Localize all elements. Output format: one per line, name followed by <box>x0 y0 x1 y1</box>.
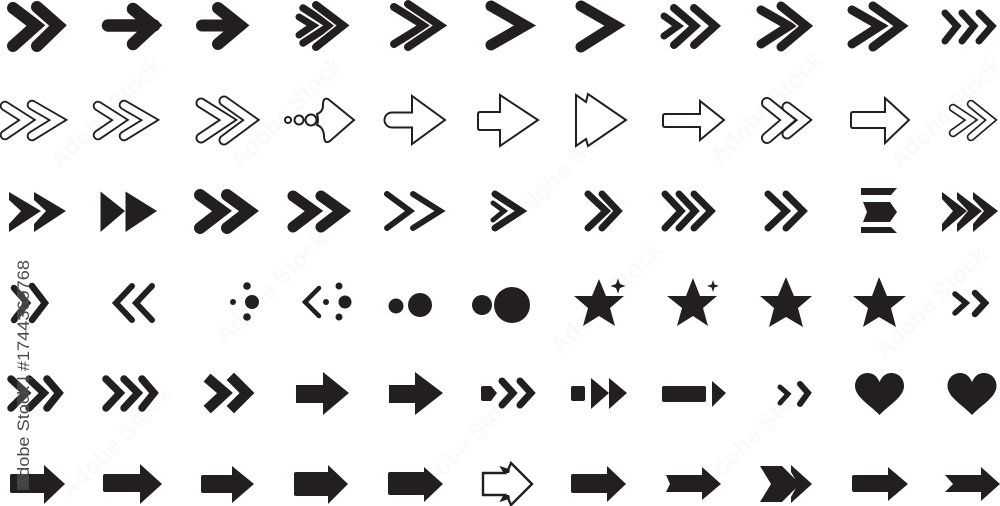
icon: outline double chevron <box>5 105 58 136</box>
icon: large chevron <box>491 6 525 45</box>
row 4 icons <box>14 277 985 327</box>
icon: heart <box>855 373 904 415</box>
row 1 icons <box>0 0 992 47</box>
icon: small double chevron <box>955 293 985 314</box>
background watermarks: Adobe Stock <box>210 226 333 349</box>
icon: triple chevron <box>665 194 711 228</box>
background watermarks: Adobe Stock <box>405 381 528 504</box>
icon: outline fast-forward <box>576 94 626 146</box>
icon: blob and chevrons <box>481 381 531 405</box>
icon: thick double chevron <box>13 7 58 46</box>
icon: triple small chevron <box>945 13 992 41</box>
icon: outline dotted arrow <box>285 99 354 142</box>
row 6 icons <box>10 463 1000 505</box>
background watermarks: Adobe Stock <box>545 236 668 359</box>
icon: triple chevron <box>664 8 715 45</box>
row 5 icons <box>11 372 996 415</box>
icon: nested double chevron <box>493 194 521 228</box>
icon: block arrow <box>201 466 254 503</box>
icon: star with sparkle <box>667 278 719 326</box>
icon: double chevron slim <box>394 4 440 47</box>
icon: star with sparkle <box>574 278 626 326</box>
icon: square-cornered double chevron <box>211 380 247 406</box>
icon: outline double chevron <box>98 105 150 136</box>
background watermarks: Adobe Stock <box>225 51 348 174</box>
icon: block arrow <box>103 464 162 504</box>
icon: double chevron <box>588 194 618 228</box>
icon: outline double chevron <box>201 101 251 140</box>
background watermarks: Adobe Stock <box>55 381 178 504</box>
background watermarks: Adobe Stock <box>45 51 168 174</box>
background watermarks: Adobe Stock <box>695 371 818 494</box>
icon: outline arrow <box>478 95 538 146</box>
icon: triple chevron nested <box>0 0 343 47</box>
icon: filled double chevron <box>9 192 66 232</box>
icon: outline jagged arrow <box>483 463 532 505</box>
icon: double chevron <box>768 194 803 228</box>
icon: rounded arrow <box>108 9 154 44</box>
row 3 icons <box>9 188 998 233</box>
icon: double chevron <box>852 6 901 47</box>
icon: filled triple chevron <box>942 192 998 232</box>
icon: bar and triangle <box>662 381 726 407</box>
icon: thin double chevron <box>387 194 440 228</box>
icon: block arrow <box>389 372 443 415</box>
icon: outline rounded double chevron <box>767 103 804 138</box>
icon: block arrow <box>852 467 908 501</box>
icon: fast-forward triangles <box>100 192 157 232</box>
background watermarks: Adobe Stock <box>870 241 993 364</box>
icon: rounded arrow <box>202 8 240 44</box>
background watermarks: Adobe Stock <box>505 106 628 229</box>
icon: triple chevron <box>106 379 154 408</box>
icon: two circles <box>388 293 432 317</box>
icon: tiny double chevron <box>780 384 808 404</box>
icon: notched arrow <box>666 467 721 500</box>
icon: outline thin arrow <box>663 101 724 140</box>
icon: star <box>853 277 906 327</box>
icon: block arrow <box>296 372 349 415</box>
background watermarks: Adobe Stock <box>705 46 828 169</box>
icon: outline arrow <box>851 98 909 143</box>
icon: chevron with triangle arrow <box>760 465 812 503</box>
icon: thick double chevron <box>293 196 342 227</box>
icon: dots <box>230 282 259 321</box>
icon: star <box>760 277 812 327</box>
icon: block arrow <box>10 465 65 504</box>
icon: notched arrow <box>945 467 1000 501</box>
icon: outline arrow <box>385 96 445 144</box>
row 2 outline icons <box>5 94 991 146</box>
icon: left chevron with dots <box>305 282 352 320</box>
icon: heart <box>948 373 996 415</box>
icon: thick double chevron <box>200 195 249 228</box>
icon: block arrow <box>571 466 626 502</box>
icon: large chevron <box>581 6 615 47</box>
icon: wide block arrow <box>294 465 348 504</box>
icon: square and triangles <box>571 378 627 409</box>
icon: left double chevron <box>116 286 152 320</box>
icon: triple chevron behind label <box>11 379 59 408</box>
icon: wide block arrow <box>388 467 443 502</box>
icon: double chevron behind label <box>14 286 45 320</box>
icon: two circles large <box>472 287 530 323</box>
icon: stacked bars shape <box>861 188 897 233</box>
stock id label: Adobe Stock | #1744369768 <box>14 260 33 489</box>
icon: double chevron <box>761 6 806 47</box>
icon: outline small double chevron <box>953 104 991 137</box>
